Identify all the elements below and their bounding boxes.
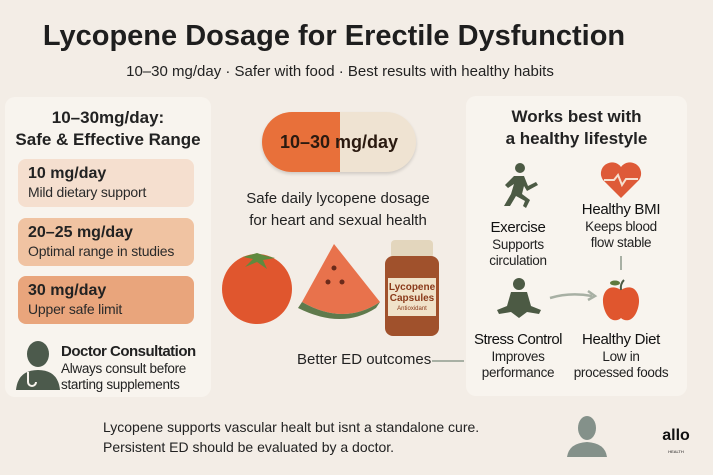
icon: heart — [600, 162, 642, 198]
dose box: 20-25 mg — [18, 218, 194, 266]
arrow line — [432, 360, 464, 362]
doctor consultation text: Doctor Consultation — [61, 343, 196, 360]
logo: allo health: HEALTH — [668, 449, 684, 454]
label: healthy BMI: Healthy BMI — [582, 201, 660, 218]
label: exercise — [489, 219, 547, 268]
footer disclaimer: Lycopene supports vascular healt but isnt a standalone cure. — [103, 419, 479, 435]
doctor consultation text — [61, 343, 196, 392]
icon: watermelon — [298, 244, 380, 319]
icon: person — [567, 416, 607, 457]
dose box: 10 mg: 10 mg/day — [28, 165, 106, 182]
dose box: 30 mg: Upper safe limit — [28, 301, 122, 317]
panel: dosage range — [5, 97, 211, 397]
label: healthy BMI: Keeps blood — [585, 219, 657, 234]
capsule caption: Safe daily lycopene dosage — [246, 190, 430, 207]
lifestyle heading: Works best with — [511, 107, 642, 126]
doctor consultation text: Always consult before — [61, 361, 186, 376]
footer disclaimer: Persistent ED should be evaluated by a doctor. — [103, 439, 394, 455]
icon: supplement bottle — [385, 240, 439, 336]
label: healthy diet: processed foods — [574, 365, 668, 380]
panel heading: 10–30mg/day: — [52, 108, 164, 127]
dose box: 30 mg — [18, 276, 194, 324]
panel heading: Safe & Effective Range — [15, 130, 201, 149]
label: healthy diet: Healthy Diet — [582, 331, 660, 348]
icon: supplement bottle: Antioxidant — [397, 306, 427, 312]
footer disclaimer — [103, 419, 479, 455]
logo: allo health: allo — [662, 427, 690, 444]
capsule — [262, 112, 416, 172]
label: exercise: Supports — [492, 237, 544, 252]
label: exercise: Exercise — [490, 219, 546, 236]
label: healthy BMI — [582, 201, 660, 250]
panel heading — [15, 108, 201, 149]
label: healthy diet: Low in — [602, 349, 640, 364]
dose box: 20-25 mg: Optimal range in studies — [28, 243, 174, 259]
icon: doctor — [16, 341, 60, 390]
label: healthy BMI: flow stable — [591, 235, 651, 250]
label: healthy diet — [574, 331, 668, 380]
label: stress control: Stress Control — [474, 331, 562, 348]
capsule caption — [246, 190, 430, 229]
lifestyle heading: a healthy lifestyle — [506, 129, 647, 148]
subtitle: 10–30 mg/day · Safer with food · Best results with healthy habits — [126, 63, 554, 80]
dose box: 10 mg: Mild dietary support — [28, 184, 146, 200]
doctor consultation text: starting supplements — [61, 377, 180, 392]
icon: tomato — [222, 253, 292, 324]
connector BMI to diet — [620, 256, 622, 270]
icon: supplement bottle: Lycopene Capsules — [389, 282, 435, 304]
dose box: 10 mg — [18, 159, 194, 207]
icon: apple — [602, 279, 640, 320]
dose box: 20-25 mg: 20–25 mg/day — [28, 224, 133, 241]
label: stress control: Improves — [491, 349, 545, 364]
icon: runner — [504, 163, 538, 208]
label: stress control — [474, 331, 562, 380]
title: Lycopene Dosage for Erectile Dysfunction — [43, 20, 625, 52]
arrow: stress to diet — [550, 290, 598, 301]
icon: meditation — [497, 278, 541, 318]
label: stress control: performance — [482, 365, 554, 380]
dose box: 30 mg: 30 mg/day — [28, 282, 106, 299]
panel: lifestyle — [466, 96, 687, 396]
capsule: 10–30 mg/day — [280, 132, 398, 152]
better ED outcomes: Better ED outcomes — [297, 351, 431, 368]
capsule caption: for heart and sexual health — [249, 212, 427, 229]
logo: allo health — [662, 427, 690, 454]
lifestyle heading — [506, 107, 647, 148]
label: exercise: circulation — [489, 253, 547, 268]
